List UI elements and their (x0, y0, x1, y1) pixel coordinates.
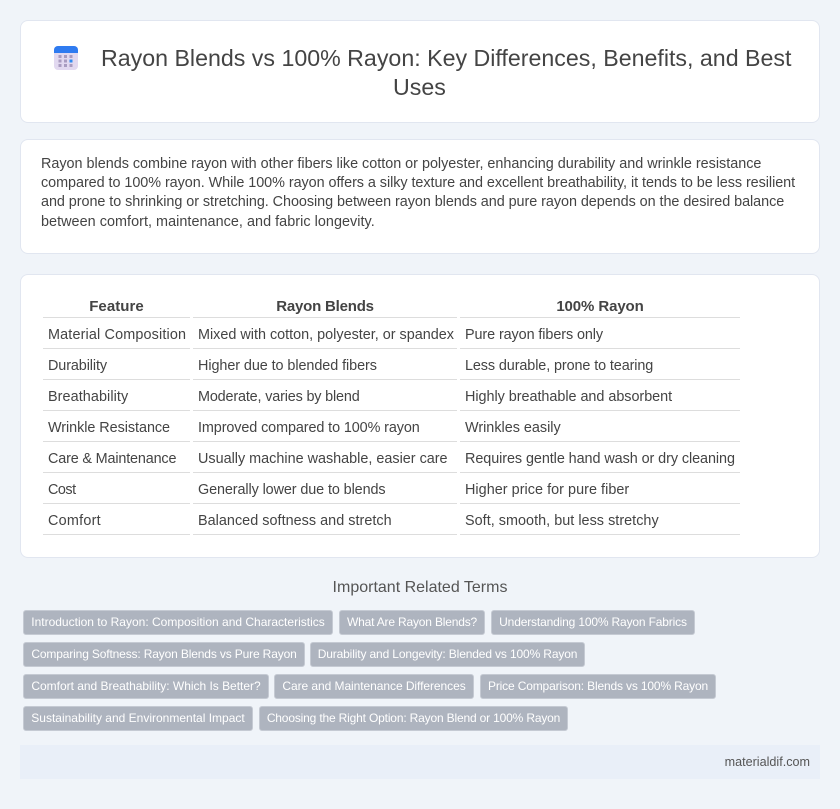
row: Durability (48, 358, 653, 374)
text block: introduction paragraph: Rayon blends combine rayon with other fibers like cotton or polyester, enhancing durability and wrinkle resistance (41, 156, 761, 172)
row: Material Composition: Material Composition (48, 327, 186, 343)
row: Material Composition (48, 327, 603, 343)
tags: related terms: Comfort and Breathability: Which Is Better? (31, 679, 261, 693)
panel: title header (20, 20, 820, 123)
row: Breathability: Breathability (48, 389, 128, 405)
icon: calendar grid (54, 46, 78, 70)
row: Durability: Durability (48, 358, 107, 374)
tags: related terms: Comparing Softness: Rayon Blends vs Pure Rayon (31, 647, 297, 661)
tags: related terms: Durability and Longevity: Blended vs 100% Rayon (318, 647, 577, 661)
title (101, 45, 792, 100)
row: Cost (48, 482, 629, 498)
row: Comfort: Balanced softness and stretch (198, 513, 392, 529)
row: Comfort (48, 513, 659, 529)
text block: introduction paragraph (41, 156, 796, 230)
row: Breathability (48, 389, 672, 405)
row: Wrinkle Resistance (48, 420, 561, 436)
tags: related terms (23, 610, 716, 731)
text block: introduction paragraph: compared to 100% rayon. While 100% rayon offers a silky texture and excellent breathability, it tends to be less resilient (41, 175, 795, 191)
tags: related terms: What Are Rayon Blends? (347, 615, 477, 629)
row: Care & Maintenance: Care & Maintenance (48, 451, 176, 467)
heading: Feature: Feature (89, 298, 144, 315)
row: Breathability: Highly breathable and absorbent (465, 389, 672, 405)
heading: Rayon Blends: Rayon Blends (276, 298, 374, 315)
row: Material Composition: Mixed with cotton, polyester, or spandex (198, 327, 454, 343)
text block: introduction paragraph: and prone to shrinking or stretching. Choosing between rayon blends and pure rayon depends on the desired balance (41, 194, 784, 210)
tags: related terms: Care and Maintenance Differences (282, 679, 466, 693)
row: Care & Maintenance: Usually machine washable, easier care (198, 451, 448, 467)
heading: Important Related Terms: Important Related Terms (333, 579, 507, 596)
footer bar (20, 745, 820, 779)
row: Cost: Cost (48, 482, 76, 498)
row: Durability: Less durable, prone to tearing (465, 358, 653, 374)
panel: introduction (20, 139, 820, 254)
text block: introduction paragraph: between comfort, maintenance, and fabric longevity. (41, 214, 375, 230)
row: Cost: Higher price for pure fiber (465, 482, 629, 498)
row: Care & Maintenance: Requires gentle hand wash or dry cleaning (465, 451, 735, 467)
row: Material Composition: Pure rayon fibers only (465, 327, 603, 343)
row: Durability: Higher due to blended fibers (198, 358, 377, 374)
heading: 100% Rayon: 100% Rayon (556, 298, 644, 315)
row: Wrinkle Resistance: Wrinkles easily (465, 420, 561, 436)
tags: related terms: Sustainability and Environmental Impact (31, 711, 245, 725)
row: Wrinkle Resistance: Wrinkle Resistance (48, 420, 170, 436)
row: Breathability: Moderate, varies by blend (198, 389, 360, 405)
panel: comparison table (20, 274, 820, 558)
title: Rayon Blends vs 100% Rayon: Key Differences, Benefits, and Best (101, 45, 791, 71)
row: Comfort: Comfort (48, 513, 101, 529)
tags: related terms: Introduction to Rayon: Composition and Characteristics (31, 615, 325, 629)
row: Care & Maintenance (48, 451, 735, 467)
tags: related terms: Understanding 100% Rayon Fabrics (499, 615, 687, 629)
row: Wrinkle Resistance: Improved compared to 100% rayon (198, 420, 420, 436)
row: Cost: Generally lower due to blends (198, 482, 386, 498)
tags: related terms: Price Comparison: Blends vs 100% Rayon (488, 679, 708, 693)
footer: site name: materialdif.com (725, 755, 810, 769)
title: Uses (393, 74, 446, 100)
row: Comfort: Soft, smooth, but less stretchy (465, 513, 659, 529)
tags: related terms: Choosing the Right Option: Rayon Blend or 100% Rayon (267, 711, 560, 725)
